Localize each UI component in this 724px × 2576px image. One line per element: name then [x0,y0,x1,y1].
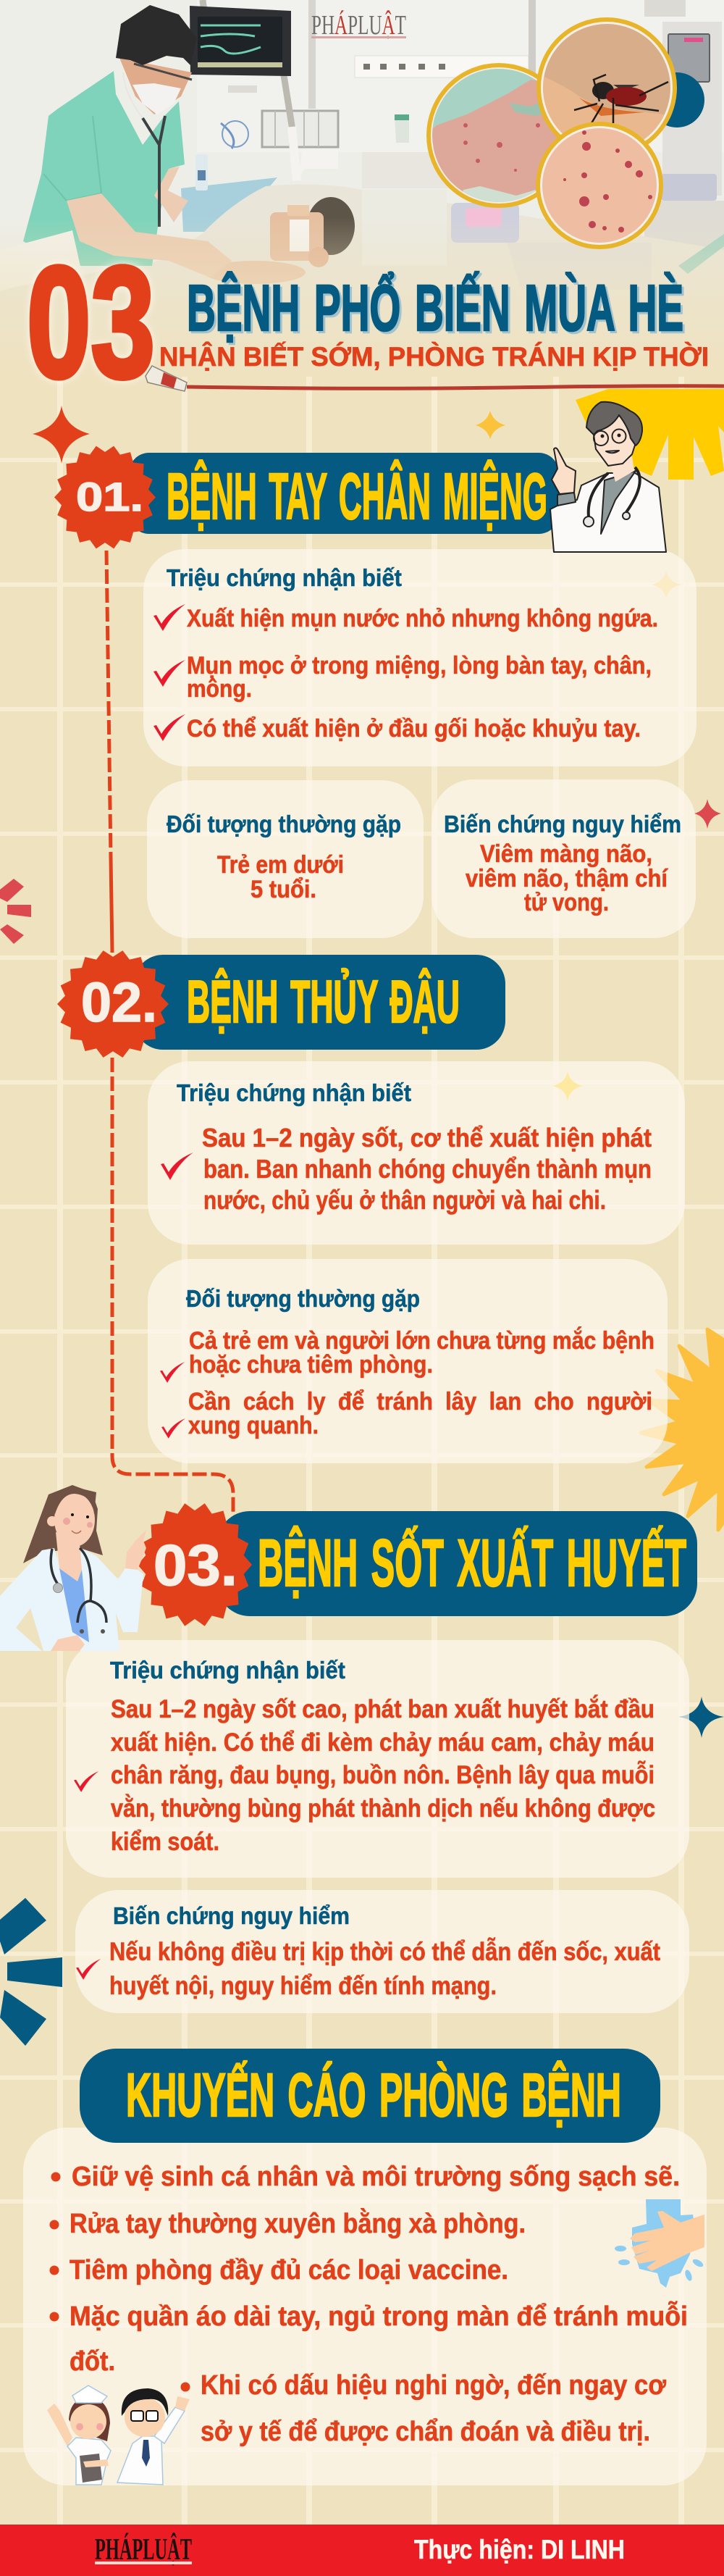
logo: Pháp Luật footer: PHÁPLUẬT [95,2533,192,2567]
advice 5: Khi có dấu hiệu nghi ngờ, đến ngay cơ [201,2370,667,2401]
badge 2 [57,950,169,1058]
decoration: blue half disc behind photos [649,72,704,127]
symptom text: Sau 1–2 ngày sốt, cơ thể xuất hiện phát [202,1123,652,1153]
badge 1 [54,446,156,548]
logo: Pháp Luật footer [95,2533,192,2567]
decoration: red star right [694,799,721,829]
target text 2 [188,1388,652,1439]
section 1 header [54,446,559,548]
panel: section 1 complications: viêm não, thậm chí [466,865,668,892]
wire basket [262,111,338,147]
target text 2: xung quanh. [188,1412,319,1439]
symptom text: chân răng, đau bụng, buồn nôn. Bệnh lây qua muỗi [111,1760,654,1789]
panel: section 1 target group [147,780,424,938]
symptom text: vằn, thường bùng phát thành dịch nếu không được [111,1794,655,1823]
connector: dashed line section 2 to 3 [112,1058,233,1514]
subheading: Triệu chứng nhận biết [167,564,402,591]
advice 5 [181,2370,667,2447]
panel: section 2 target group [148,1259,668,1463]
panel: section 1 target group: Đối tượng thường gặp [167,811,401,837]
panel: section 2 target group: Đối tượng thường gặp [186,1285,420,1312]
icon: pale star [652,571,681,598]
advice 2: Rửa tay thường xuyên bằng xà phòng. [70,2207,526,2239]
symptom text: Sau 1–2 ngày sốt cao, phát ban xuất huyết bắt đầu [111,1694,654,1723]
illustration: female doctor [0,1485,146,1651]
panel: section 1 target group: 5 tuổi. [251,876,316,903]
subtitle: NHẬN BIẾT SỚM, PHÒNG TRÁNH KỊP THỜI [159,341,709,372]
header bar 3 [217,1511,697,1616]
panel: section 1 complications: tử vong. [524,889,609,916]
advice 3: Tiêm phòng đầy đủ các loại vaccine. [70,2255,508,2286]
illustration: nurse and doctor [47,2385,190,2485]
doctor: face and hair [119,58,192,114]
panel: section 1 symptoms [143,549,696,766]
advice 4: đốt. [70,2346,115,2377]
photo: mosquito on skin [539,20,675,156]
heading 2: BỆNH THỦY ĐẬU [187,968,460,1035]
section 3 header [138,1503,697,1626]
blue tub and bottle [181,177,277,232]
decoration: big yellow sun right [641,1329,724,1530]
symptom text: xuất hiện. Có thể đi kèm chảy máu cam, chảy máu [111,1728,654,1757]
panel: section 1 complications: Viêm màng não, [480,840,652,868]
icon: check [161,1153,193,1180]
panel: section 1 target group: Trẻ em dưới [217,851,344,879]
complication text [109,1937,660,2000]
target text 1: Cả trẻ em và người lớn chưa từng mắc bệnh [189,1327,654,1355]
symptom 1: Xuất hiện mụn nước nhỏ nhưng không ngứa. [187,605,658,632]
monitor [190,6,291,76]
symptom text: kiểm soát. [111,1828,219,1856]
bed sheet [9,184,724,290]
symptom 2: mông. [187,675,252,703]
photo: hand with blisters [429,65,572,210]
photo circles [429,20,675,247]
icon: check [153,714,185,741]
thermometer tube and red line [146,366,724,391]
logo: Pháp Luật top: PHÁPLUẬT [311,10,406,41]
panel: section 3 complications: Biến chứng nguy hiểm [113,1902,350,1929]
fade overlay [0,217,724,377]
decoration: yellow sun top right [576,389,724,480]
wall outlets [355,56,529,78]
decoration: red half sun left [0,879,31,944]
panel: prevention [23,2049,707,2485]
advice 5: sở y tế để được chẩn đoán và điều trị. [201,2417,650,2447]
symptom text: ban. Ban nhanh chóng chuyển thành mụn [203,1154,652,1184]
illustration: male doctor pointing up [550,402,666,552]
doctor: scrubs [23,71,185,266]
credit: Thực hiện: DI LINH [414,2535,625,2564]
advice 1: Giữ vệ sinh cá nhân và môi trường sống sạch sẽ. [72,2162,680,2192]
icon: check [153,604,185,631]
decoration: navy star right [678,1697,724,1738]
advice 4 [49,2300,688,2377]
footer [0,2525,724,2576]
decoration: navy half sun left [0,1898,62,2046]
symptom text: nước, chủ yếu ở thân người và hai chi. [203,1185,606,1215]
icon: check [153,660,185,687]
child [204,261,306,284]
doctor: arm and hand [67,193,232,277]
symptom text [202,1123,652,1215]
decoration: orange star [33,406,90,464]
doctor: stethoscope [143,116,165,227]
icon: hand washing [615,2199,704,2288]
advice 4: Mặc quần áo dài tay, ngủ trong màn để tránh muỗi [70,2300,688,2332]
prevention header [80,2049,660,2143]
target text 2: Cần cách ly để tránh lây lan cho người [188,1388,652,1415]
icon: check [160,1362,185,1383]
decoration: yellow star [476,411,505,439]
icon: check [161,1418,185,1439]
icon: check [76,1959,101,1980]
symptom 2: Mụn mọc ở trong miệng, lòng bàn tay, chân, [187,652,652,679]
icon: check [74,1771,98,1792]
header bar 1 [129,453,559,534]
infusion pump [451,203,519,243]
badge 1: 01. [76,474,143,519]
symptom text [111,1694,655,1856]
symptom 2 [187,652,652,703]
title number 03: 03 [27,235,155,411]
target text 1 [189,1327,654,1379]
panel: section 3 symptoms [66,1640,689,1878]
icon: pale yellow star [552,1071,583,1101]
header bar 2 [134,955,505,1050]
panel: section 1 complications [432,779,696,938]
badge 3 [138,1503,252,1626]
badge 3: 03. [153,1533,237,1597]
monitor arm [203,0,297,181]
bed rail [0,230,81,291]
connector: dashed line section 1 to 2 [106,551,112,953]
complication text: Nếu không điều trị kịp thời có thể dẫn đến sốc, xuất [109,1937,660,1966]
panel: section 1 complications: Biến chứng nguy hiểm [444,811,681,837]
complication text: huyết nội, nguy hiểm đến tính mạng. [109,1972,497,2000]
panel: section 2 symptoms [148,1061,685,1245]
symptom 3: Có thể xuất hiện ở đầu gối hoặc khuỷu tay. [187,715,641,743]
target text 1: hoặc chưa tiêm phòng. [189,1351,433,1379]
panel: section 2 symptoms: Triệu chứng nhận biết [177,1079,411,1106]
panel: section 3 complications [75,1890,689,2013]
badge 2: 02. [81,971,157,1034]
photo: rash on skin [538,123,662,247]
section 2 header [57,950,505,1058]
panel: section 3 symptoms: Triệu chứng nhận biết [110,1657,345,1684]
header photo: doctor and child in hospital [0,0,724,320]
